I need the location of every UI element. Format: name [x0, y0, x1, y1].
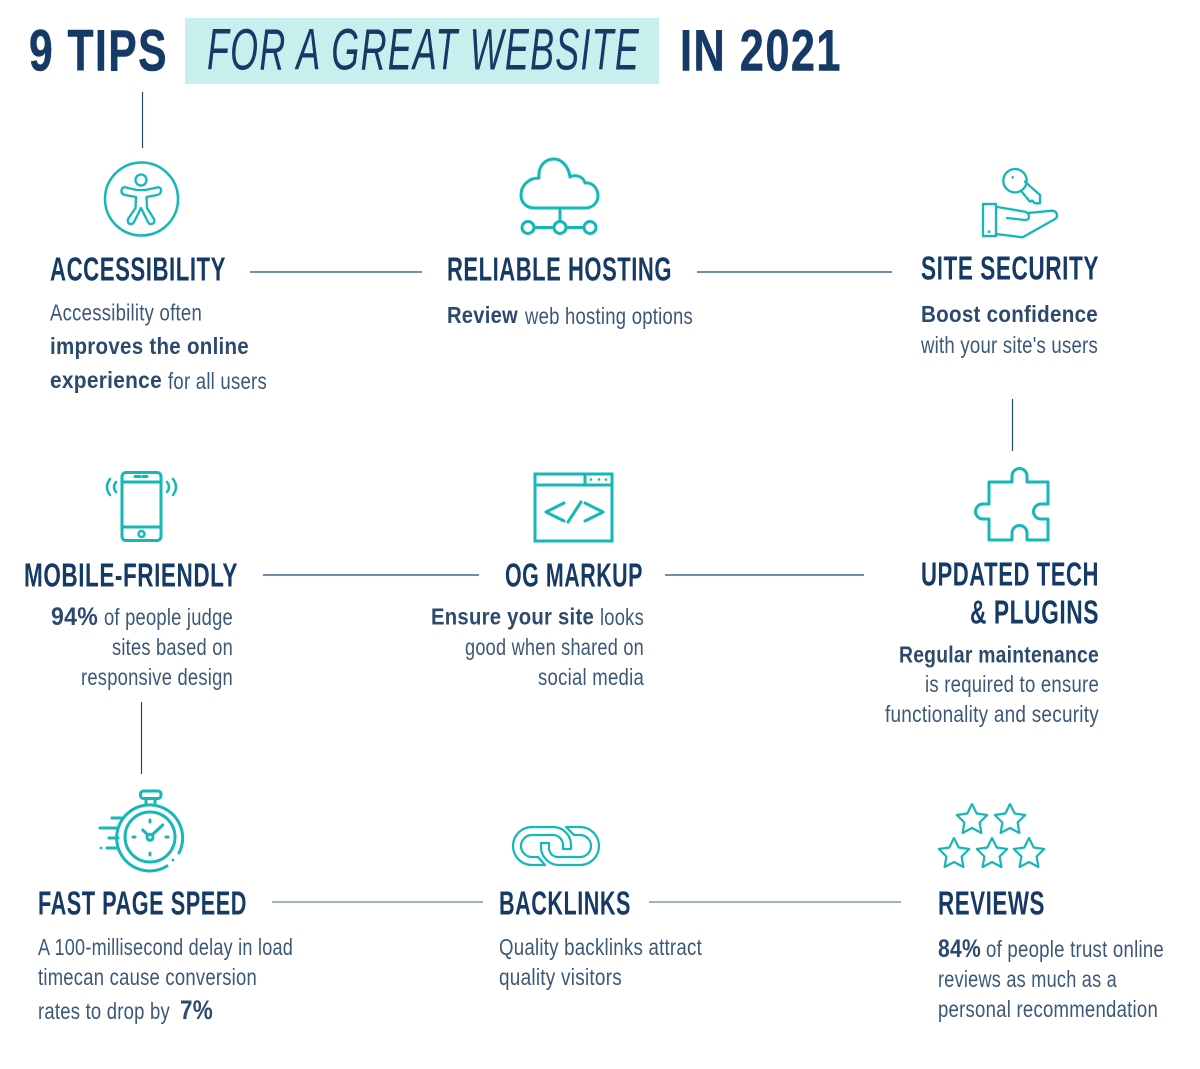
heading: updated tech and plugins: UPDATED TECH: [921, 556, 1099, 592]
text: og markup description: Ensure your site: [431, 604, 594, 630]
icon: stopwatch: [100, 791, 183, 871]
icon: key over hand: [983, 169, 1057, 237]
icon: accessibility person: [105, 162, 178, 236]
text: backlinks description: quality visitors: [499, 964, 622, 990]
text: accessibility description: [50, 300, 267, 394]
panel: accessibility: [50, 162, 267, 394]
heading: fast page speed: FAST PAGE SPEED: [38, 884, 247, 922]
icon: puzzle piece: [976, 469, 1048, 540]
text: fast page speed description: [38, 934, 293, 1025]
text: reliable hosting description: [447, 302, 693, 329]
heading: updated tech and plugins: [921, 556, 1099, 630]
text: reviews description: 84%: [938, 935, 981, 963]
panel: mobile-friendly: [24, 472, 238, 690]
title: [29, 18, 842, 84]
text: site security description: with your site's users: [920, 332, 1098, 358]
heading: og markup: OG MARKUP: [505, 556, 643, 594]
heading: site security: SITE SECURITY: [921, 250, 1099, 286]
text: og markup description: [431, 604, 644, 690]
title: 9 tips: 9 TIPS: [29, 18, 168, 84]
panel: reliable hosting: [447, 159, 693, 329]
panel: site security: [920, 169, 1099, 358]
heading: backlinks: BACKLINKS: [499, 884, 631, 922]
title highlight band: [185, 18, 659, 84]
text: og markup description: looks: [600, 604, 644, 630]
heading: accessibility: ACCESSIBILITY: [50, 250, 226, 288]
text: accessibility description: improves the online: [50, 333, 249, 359]
text: mobile-friendly description: of people judge: [104, 604, 233, 630]
text: mobile-friendly description: sites based on: [112, 634, 233, 660]
panel: updated tech and plugins: [885, 469, 1099, 727]
text: mobile-friendly description: responsive design: [81, 664, 233, 690]
heading: reviews: REVIEWS: [938, 884, 1045, 922]
icon: five stars: [939, 804, 1044, 867]
text: reviews description: reviews as much as a: [938, 966, 1117, 992]
text: site security description: Boost confidence: [921, 301, 1098, 327]
text: updated tech description: Regular maintenance: [899, 642, 1099, 668]
text: backlinks description: [499, 934, 702, 990]
panel: reviews: [938, 804, 1164, 1022]
text: site security description: [920, 301, 1098, 358]
text: fast page speed description: 7%: [180, 995, 213, 1025]
text: fast page speed description: timecan cause conversion: [38, 964, 257, 990]
text: mobile-friendly description: 94%: [51, 603, 98, 631]
panel: og markup: [431, 474, 644, 690]
title: in 2021: IN 2021: [680, 18, 842, 84]
icon: chain link: [513, 827, 599, 865]
heading: updated tech and plugins: & PLUGINS: [970, 594, 1099, 630]
text: updated tech description: is required to ensure: [925, 671, 1099, 697]
text: fast page speed description: A 100-millisecond delay in load: [38, 934, 293, 960]
text: accessibility description: for all users: [168, 368, 267, 394]
text: reliable hosting description: Review: [447, 302, 518, 328]
text: backlinks description: Quality backlinks attract: [499, 934, 702, 960]
text: reviews description: of people trust online: [986, 936, 1164, 962]
panel: backlinks: [499, 827, 702, 990]
text: updated tech description: functionality and security: [885, 701, 1099, 727]
panel: fast page speed: [38, 791, 293, 1025]
text: fast page speed description: rates to drop by: [38, 998, 170, 1024]
icon: browser code window: [535, 474, 612, 541]
icon: cloud network: [521, 159, 598, 234]
text: og markup description: good when shared on: [465, 634, 644, 660]
text: reliable hosting description: web hosting options: [524, 303, 693, 329]
heading: mobile-friendly: MOBILE-FRIENDLY: [24, 556, 238, 594]
text: accessibility description: Accessibility often: [50, 300, 202, 326]
text: reviews description: [938, 935, 1164, 1022]
text: updated tech description: [885, 642, 1099, 727]
icon: vibrating phone: [107, 472, 176, 540]
heading: reliable hosting: RELIABLE HOSTING: [447, 250, 672, 288]
text: mobile-friendly description: [51, 603, 233, 690]
text: og markup description: social media: [538, 664, 644, 690]
text: accessibility description: experience: [50, 367, 162, 393]
title highlight band: FOR A GREAT WEBSITE: [207, 18, 640, 82]
